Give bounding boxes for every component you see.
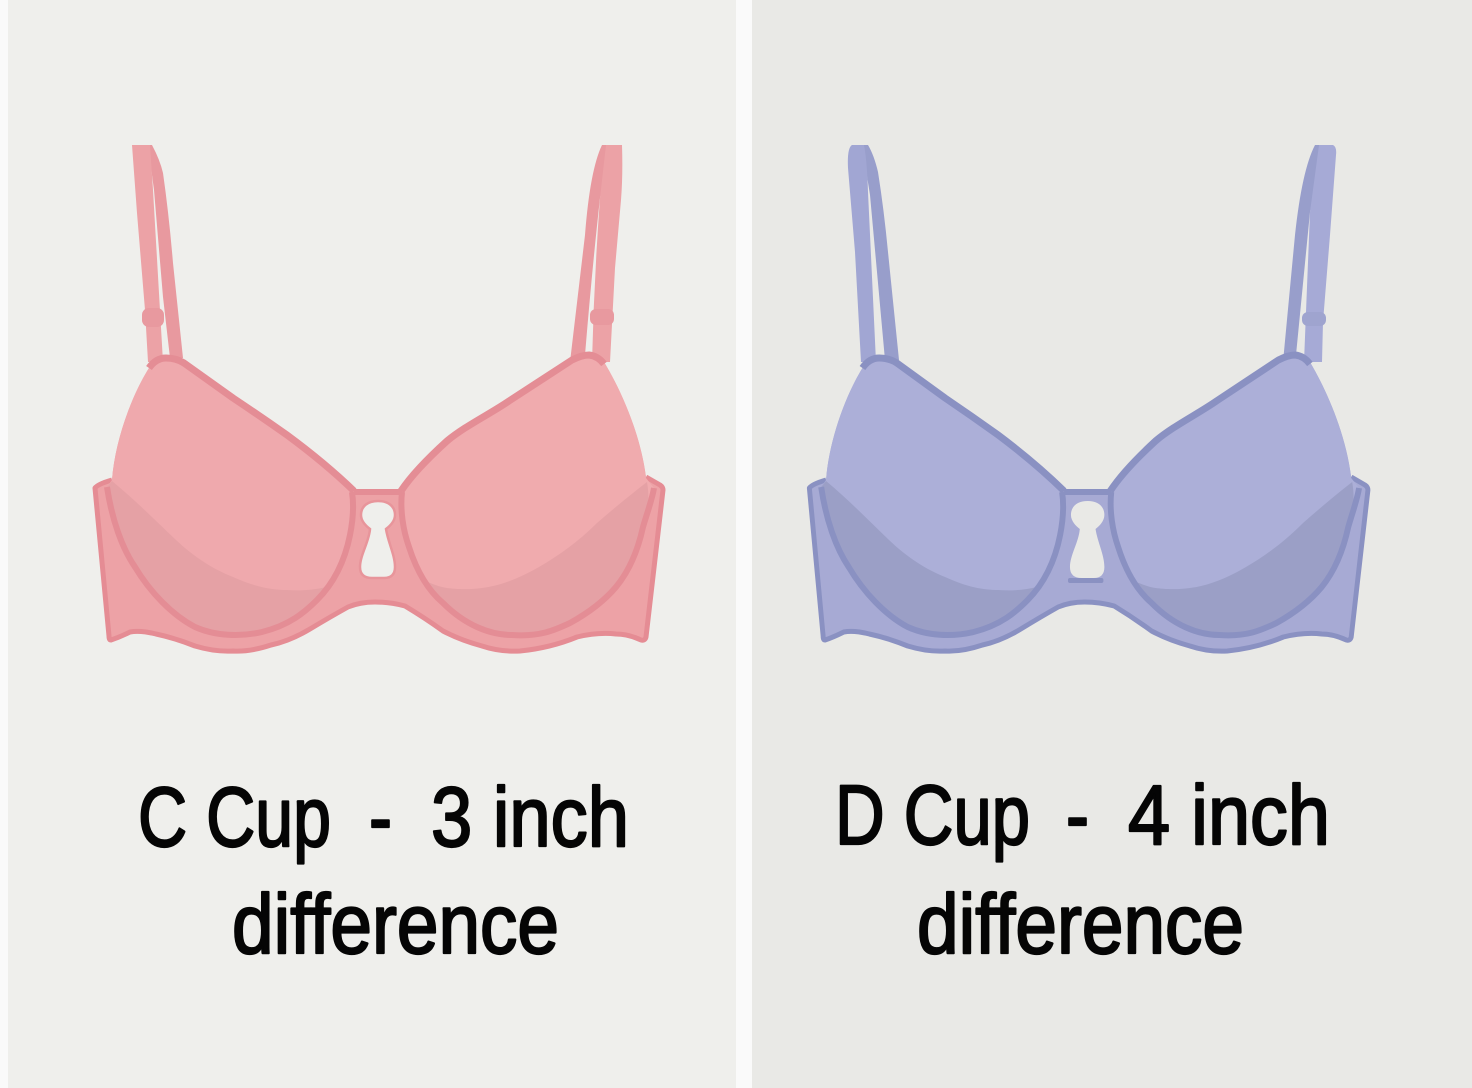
left cup shadow bbox=[821, 481, 1037, 635]
caption: D cup bbox=[835, 768, 1330, 971]
panel background: D cup bbox=[752, 0, 1472, 1088]
right strap, back bbox=[1283, 145, 1325, 362]
band edge trim bbox=[95, 477, 663, 651]
right cup shadow bbox=[1132, 482, 1354, 635]
keyhole bottom trim bbox=[1068, 578, 1103, 583]
left neckline trim bbox=[862, 358, 1064, 491]
left strap, back bbox=[862, 145, 899, 360]
left underwire bbox=[107, 487, 353, 635]
right underwire bbox=[401, 488, 654, 635]
caption: D cup: - bbox=[1066, 768, 1089, 862]
right underwire bbox=[1111, 488, 1359, 635]
left neckline trim bbox=[149, 358, 354, 491]
right strap, front bbox=[1304, 145, 1336, 362]
band edge trim bbox=[809, 477, 1368, 651]
gore top trim bbox=[354, 489, 402, 495]
caption: C cup: - bbox=[369, 770, 392, 864]
band and wings bbox=[809, 353, 1368, 651]
caption: C cup bbox=[138, 770, 629, 971]
caption: D cup: difference bbox=[917, 877, 1244, 971]
panel background: C cup bbox=[8, 0, 736, 1088]
panel: C cup bbox=[8, 0, 736, 1088]
caption: C cup: C Cup bbox=[138, 770, 331, 864]
band and wings bbox=[95, 353, 663, 651]
icon: purple bra bbox=[809, 145, 1368, 651]
left strap slider bbox=[142, 308, 164, 327]
keyhole cutout bbox=[1070, 501, 1104, 578]
caption: D cup: 4 inch bbox=[1128, 768, 1330, 862]
right strap slider bbox=[590, 309, 614, 325]
left underwire bbox=[821, 487, 1063, 635]
right strap slider bbox=[1302, 312, 1326, 326]
right neckline trim bbox=[401, 355, 604, 491]
right cup bbox=[401, 356, 654, 635]
left cup shadow bbox=[107, 481, 326, 635]
gore top trim bbox=[1064, 489, 1111, 495]
icon: pink bra bbox=[95, 145, 663, 651]
left strap, front bbox=[132, 145, 163, 362]
caption: C cup: difference bbox=[232, 877, 559, 971]
right strap, back bbox=[570, 145, 612, 362]
left cup bbox=[107, 357, 353, 635]
right cup shadow bbox=[423, 482, 648, 635]
left strap, back bbox=[148, 145, 183, 358]
caption: C cup: 3 inch bbox=[431, 770, 629, 864]
right cup bbox=[1111, 356, 1359, 635]
left cup bbox=[821, 357, 1063, 635]
left strap, front bbox=[848, 145, 876, 362]
panel: D cup bbox=[752, 0, 1472, 1088]
keyhole cutout bbox=[360, 501, 395, 578]
right strap, front bbox=[592, 145, 622, 362]
caption: D cup: D Cup bbox=[835, 768, 1030, 862]
right neckline trim bbox=[1110, 355, 1310, 491]
